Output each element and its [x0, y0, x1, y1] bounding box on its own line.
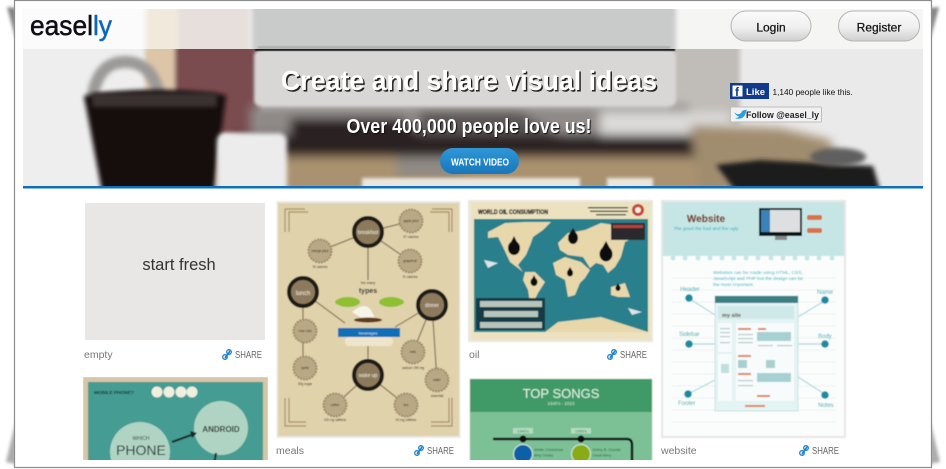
meals thumbnail: types: [359, 288, 377, 295]
meals thumbnail: coffee: [331, 403, 340, 407]
meals thumbnail: 40 mg caffeine: [396, 418, 417, 422]
meals thumbnail: grapefruit: [403, 259, 417, 263]
share link: SHARE: [427, 446, 454, 457]
card: mobile phone thumbnail: ANDROID: [202, 425, 240, 434]
meals thumbnail: apple juice: [403, 219, 419, 223]
card: empty: start fresh: [142, 256, 216, 274]
meals thumbnail: calcium 290 mg: [402, 366, 424, 370]
oil thumbnail: WORLD OIL CONSUMPTION: [478, 209, 548, 216]
card: website: [660, 200, 846, 457]
website thumbnail: [661, 200, 846, 438]
card: top songs thumbnail: 1940's - 2010: [547, 401, 575, 406]
meals thumbnail: milk: [410, 350, 416, 354]
facebook like: f: [735, 85, 740, 99]
card: meals: [276, 201, 460, 457]
meals thumbnail: breakfast: [358, 230, 379, 236]
card: empty: empty: [84, 349, 113, 361]
hero heading: Create and share visual ideas: [281, 65, 657, 96]
meals thumbnail: beverages: [359, 330, 377, 336]
facebook like: [730, 83, 853, 99]
card: top songs thumbnail: TOP SONGS: [523, 386, 600, 401]
meals thumbnail: rose cola: [299, 329, 312, 333]
oil thumbnail: [468, 200, 653, 342]
share link: [608, 350, 647, 361]
card: meals: meals: [276, 445, 304, 457]
register button: Register: [857, 20, 901, 34]
website thumbnail: the most important.: [713, 282, 754, 288]
meals thumbnail: tea: [404, 403, 408, 407]
share link: SHARE: [235, 350, 262, 361]
card: top songs thumbnail: 1950's: [575, 428, 587, 434]
meals thumbnail: 76 calories: [312, 265, 328, 269]
website thumbnail: Body: [818, 334, 832, 340]
share link: SHARE: [620, 350, 647, 361]
meals thumbnail: lunch: [296, 291, 310, 297]
meals thumbnail: dinner: [425, 303, 439, 309]
card: top songs thumbnail: White Christmas: [534, 447, 563, 452]
login button: Login: [756, 20, 786, 34]
meals thumbnail: 70 calories: [402, 275, 418, 279]
meals thumbnail: sprite: [301, 366, 309, 370]
card: top songs thumbnail: [469, 378, 653, 468]
card: top songs thumbnail: 1940's: [517, 428, 529, 434]
card: mobile phone thumbnail: PHONE: [116, 442, 166, 458]
facebook like: 1,140 people like this.: [772, 87, 853, 97]
register button: [838, 11, 920, 41]
meals thumbnail: the many: [361, 281, 375, 285]
meals thumbnail: 100 mg caffeine: [324, 418, 347, 422]
share link: [223, 350, 262, 361]
card: top songs thumbnail: Chuck Berry: [592, 454, 612, 458]
meals thumbnail: 97 calories: [403, 235, 419, 239]
watch video button: [440, 148, 519, 174]
website thumbnail: Websites can be made using HTML, CSS,: [713, 270, 803, 276]
share link: [800, 446, 839, 457]
meals thumbnail: essential: [431, 394, 444, 398]
website thumbnail: The good the bad and the ugly: [673, 226, 739, 232]
header bar: [30, 9, 923, 49]
card: oil: [468, 200, 653, 361]
card: website: website: [660, 445, 697, 457]
website thumbnail: Name: [817, 290, 834, 296]
website thumbnail: my site: [722, 313, 741, 319]
card: oil: oil: [469, 349, 480, 361]
card: mobile phone thumbnail: WHICH: [133, 436, 150, 442]
website thumbnail: Header: [680, 287, 700, 293]
meals thumbnail: 39g sugar: [298, 382, 313, 386]
login button: [731, 11, 811, 41]
card: mobile phone thumbnail: [83, 377, 268, 469]
logo: easelly: [30, 10, 112, 41]
card: top songs thumbnail: Johny B. Goode: [592, 447, 621, 452]
blue divider: [23, 186, 923, 188]
website thumbnail: Footer: [678, 401, 695, 407]
card: empty: [84, 203, 265, 361]
meals thumbnail: water: [433, 378, 442, 382]
twitter follow: Follow @easel_ly: [746, 110, 820, 120]
share link: [415, 446, 454, 457]
hero subheading: Over 400,000 people love us!: [346, 116, 592, 138]
card: top songs thumbnail: Bing Crosby: [534, 454, 553, 458]
facebook like: Like: [746, 87, 765, 98]
twitter follow: [730, 107, 822, 122]
website thumbnail: Website: [687, 214, 726, 225]
watch video button: WATCH VIDEO: [451, 158, 509, 168]
website thumbnail: Sidebar: [679, 332, 700, 338]
meals thumbnail: orange juice: [311, 249, 329, 253]
website thumbnail: Notes: [818, 403, 834, 409]
share link: SHARE: [812, 446, 839, 457]
meals thumbnail: wake up: [359, 373, 378, 379]
meals thumbnail: [276, 201, 460, 438]
card: mobile phone thumbnail: MOBILE PHONE?: [94, 390, 134, 396]
website thumbnail: JavaScript and PHP but the design can be: [713, 276, 803, 282]
hero banner photo: [23, 49, 923, 186]
